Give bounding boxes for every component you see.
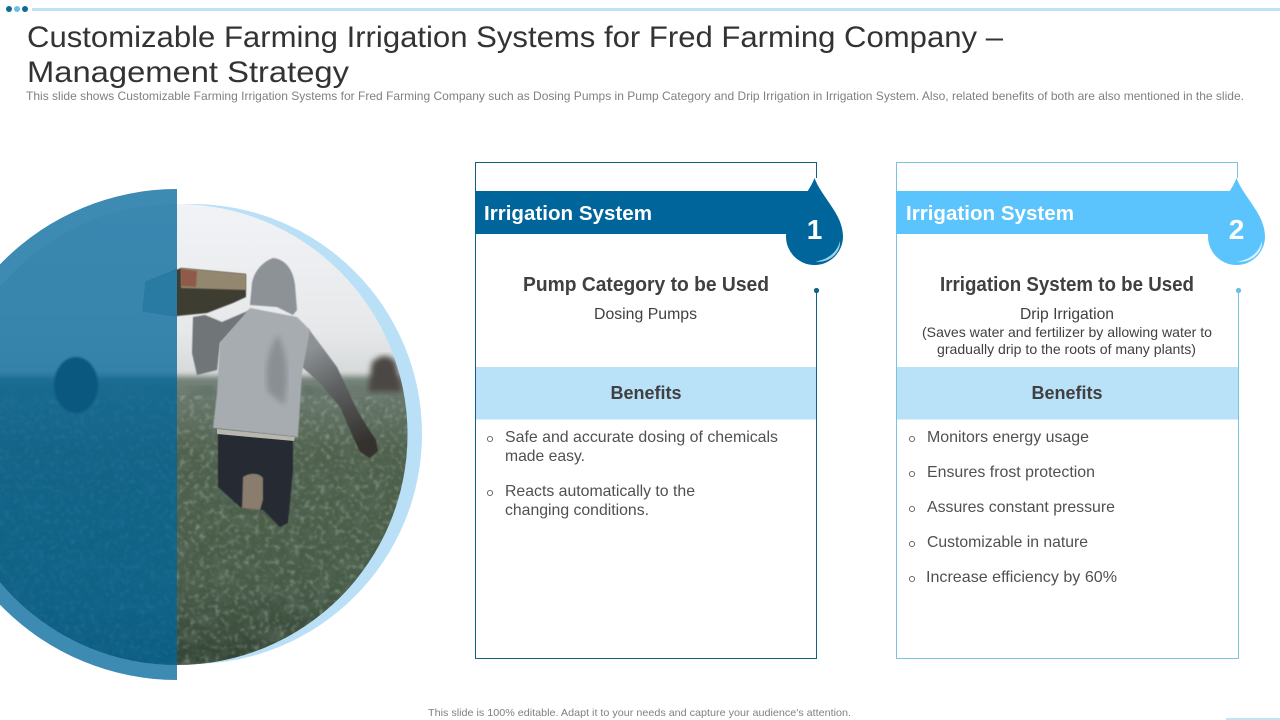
- category heading: Pump Category to be Used: [523, 274, 769, 296]
- benefits band: Benefits: [1031, 383, 1103, 403]
- category value: Dosing Pumps: [594, 306, 697, 323]
- hood: [250, 258, 297, 315]
- benefits list: Increase efficiency by 60%: [926, 569, 1117, 586]
- header band: [896, 191, 1230, 234]
- system description: Drip Irrigation: [1020, 306, 1114, 323]
- benefits list: Monitors energy usage: [927, 429, 1089, 446]
- footer note: This slide is 100% editable. Adapt it to your needs and capture your audience's attention.: [428, 707, 851, 719]
- benefits list: changing conditions.: [505, 502, 649, 519]
- benefits list: Reacts automatically to the: [505, 483, 695, 500]
- benefits band: [897, 367, 1238, 420]
- panel: irrigation system 1: [475, 162, 843, 658]
- blue half-circle overlay: [0, 189, 177, 680]
- benefits list: [909, 429, 1117, 586]
- header text: Irrigation System: [906, 203, 1074, 225]
- benefits list: Ensures frost protection: [927, 464, 1095, 481]
- card border: [476, 162, 816, 658]
- icon: water drop 1: [786, 178, 843, 265]
- benefits list: [487, 429, 778, 519]
- bottom right accent strip: [1226, 718, 1280, 720]
- title: Customizable Farming Irrigation Systems for Fred Farming Company –: [27, 21, 1003, 54]
- torso: [213, 308, 310, 437]
- connector dot: [814, 288, 819, 293]
- left arm: [192, 310, 250, 375]
- title: Management Strategy: [27, 56, 349, 89]
- panel: irrigation system 2: [896, 162, 1265, 658]
- system description: (Saves water and fertilizer by allowing water to: [922, 324, 1212, 340]
- benefits list: Customizable in nature: [927, 534, 1088, 551]
- icon: water drop 2: [1208, 178, 1265, 265]
- benefits list: Assures constant pressure: [927, 499, 1115, 516]
- header text: Irrigation System: [484, 203, 652, 225]
- icon: water drop 2: 2: [1229, 214, 1244, 245]
- benefits band: Benefits: [610, 383, 682, 403]
- top accent bar: [6, 6, 1280, 12]
- benefits list: made easy.: [505, 448, 585, 465]
- header band: [475, 191, 809, 234]
- system description: [922, 306, 1212, 357]
- title: [27, 21, 1003, 89]
- connector dot: [1236, 288, 1241, 293]
- light blue backing circle: [0, 204, 422, 664]
- shoe: [242, 474, 263, 510]
- icon: water drop 1: 1: [807, 214, 822, 245]
- system heading: Irrigation System to be Used: [940, 274, 1194, 296]
- card border: [896, 162, 1238, 658]
- photo: farm worker in field: [0, 200, 420, 670]
- system description: gradually drip to the roots of many plants): [937, 341, 1196, 357]
- right arm and hand: [302, 328, 378, 458]
- benefits list: Safe and accurate dosing of chemicals: [505, 429, 778, 446]
- jeans: [218, 433, 293, 527]
- crate: [143, 268, 246, 316]
- circular photo of farm worker with blue overlay: [0, 189, 422, 680]
- subtitle: This slide shows Customizable Farming Irrigation Systems for Fred Farming Company such as Dosing Pumps in Pump Category and Drip Irrigation in Irrigation System. Also, related benefits of both are also mentioned in the slide.: [26, 89, 1244, 103]
- benefits band: [476, 367, 816, 420]
